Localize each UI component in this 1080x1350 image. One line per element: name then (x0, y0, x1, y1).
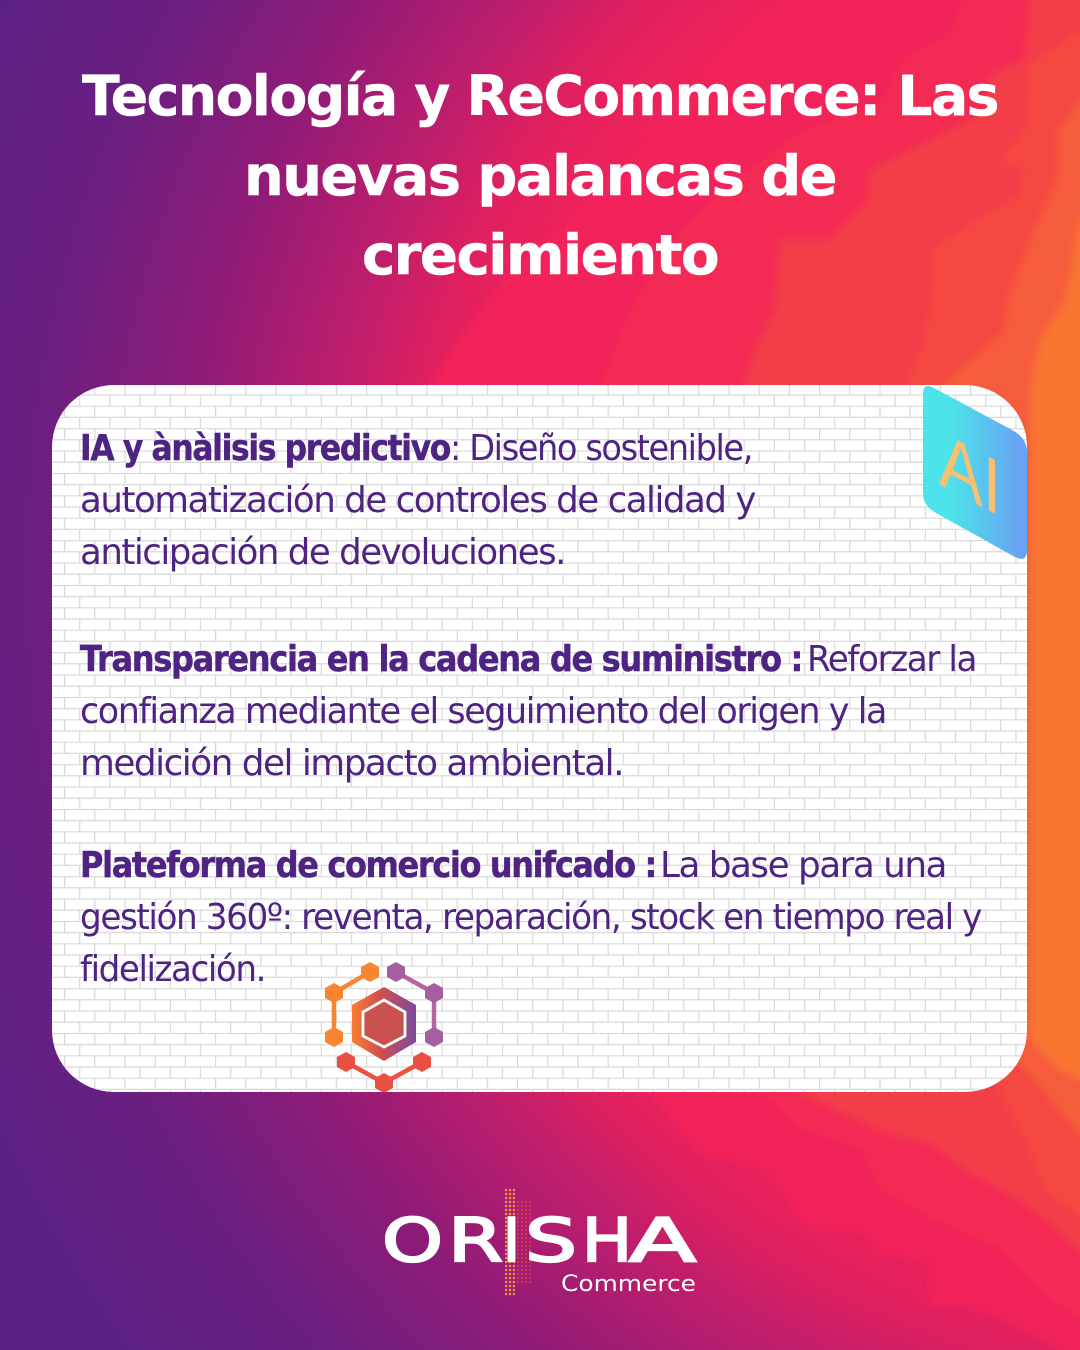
title: nuevas palancas de (244, 144, 836, 208)
text block: Plateforma de comercio unificado: gestión 360º: reventa, reparación, stock en tiempo real y (80, 897, 982, 938)
text block: Plateforma de comercio unificado (80, 845, 982, 990)
icon: hexagon network (325, 962, 443, 1093)
text block: Plateforma de comercio unificado: Plateforma de comercio unifcado : (80, 845, 656, 886)
logo: ORISHA Commerce: Commerce (561, 1272, 696, 1297)
icon: AI tile: AI (939, 414, 1001, 534)
title: Tecnología y ReCommerce: Las (82, 64, 998, 128)
title (82, 64, 998, 287)
text block: Transparencia en la cadena de suministro: Transparencia en la cadena de suministro : (80, 639, 802, 680)
title: crecimiento (362, 223, 718, 287)
logo: ORISHA Commerce: H (582, 1206, 632, 1276)
text block: IA y análisis predictivo: anticipación de devoluciones. (80, 532, 565, 573)
logo: ORISHA Commerce: S (525, 1206, 577, 1276)
text block: Transparencia en la cadena de suministro (80, 639, 976, 784)
text block: Transparencia en la cadena de suministro: confianza mediante el seguimiento del origen y la (80, 691, 886, 732)
logo: ORISHA Commerce: R (448, 1206, 503, 1276)
text block: IA y análisis predictivo (80, 428, 756, 573)
logo: ORISHA Commerce: I (503, 1206, 520, 1276)
text block: Transparencia en la cadena de suministro: Reforzar la (807, 639, 976, 680)
icon: AI tile (923, 386, 1027, 559)
logo: ORISHA Commerce (382, 1188, 696, 1297)
panel: white brick card (52, 385, 1027, 1092)
text block: IA y análisis predictivo: automatización de controles de calidad y (80, 480, 756, 521)
text block: IA y análisis predictivo: IA y ànàlisis predictivo (80, 428, 451, 469)
text block: IA y análisis predictivo: : Diseño sostenible, (450, 428, 752, 469)
text block: Plateforma de comercio unificado: La base para una (660, 845, 946, 886)
text block: Transparencia en la cadena de suministro: medición del impacto ambiental. (80, 743, 623, 784)
logo: ORISHA Commerce: A (629, 1206, 696, 1276)
logo: ORISHA Commerce: O (382, 1206, 443, 1276)
text block: Plateforma de comercio unificado: fidelización. (80, 949, 265, 990)
